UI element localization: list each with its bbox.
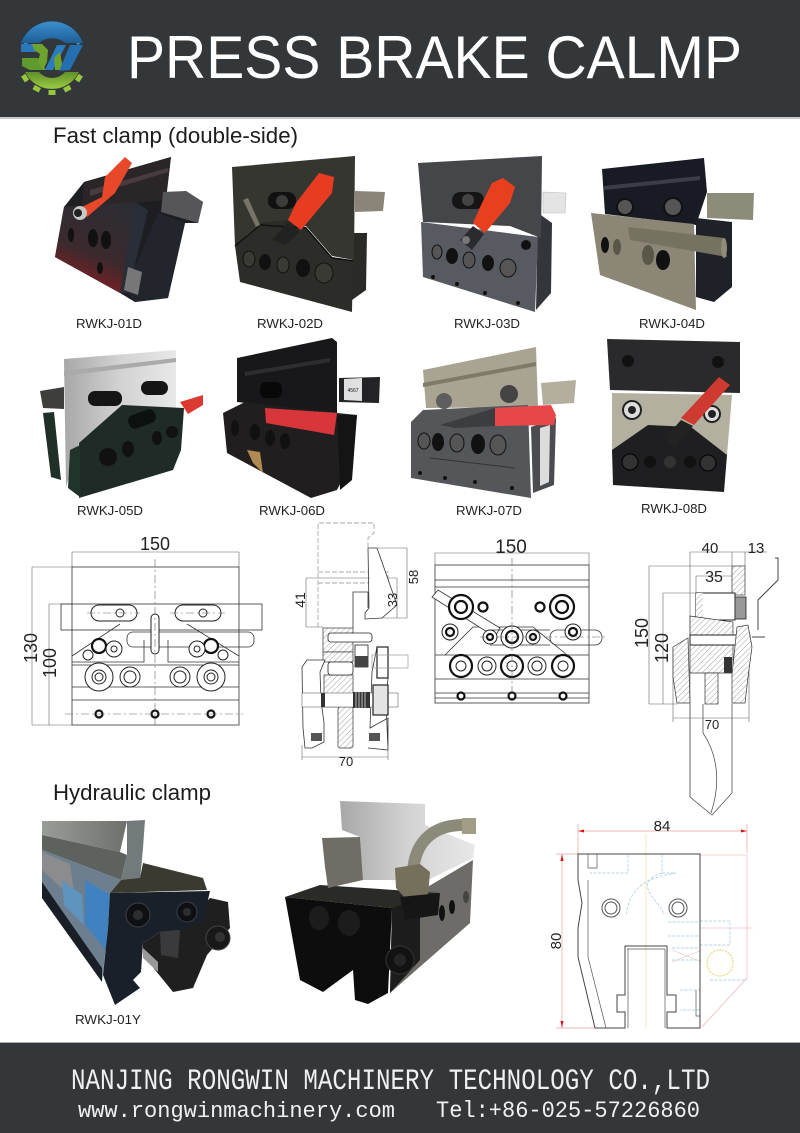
label RWKJ-06D: RWKJ-06D [259,504,325,518]
drawing: front view with horizontal lever [432,537,608,703]
dimension 130 [21,567,72,725]
product RWKJ-07D [411,347,576,498]
product RWKJ-02D [232,156,385,312]
product hydraulic clamp with fitting [285,801,476,1004]
dimension 150: 150 [140,534,170,554]
drawing: side section with tool [292,523,421,769]
product RWKJ-04D [591,158,754,310]
icon: company gear logo [21,21,83,95]
dimension 40: 40 [702,540,718,557]
product RWKJ-08D [607,339,740,492]
dimension 150: 150 [632,618,652,648]
product RWKJ-05D [40,350,203,498]
dimension 70: 70 [705,717,719,732]
dimension 35 [696,569,732,593]
product RWKJ-06D: 4567 [347,388,359,394]
dimension 33 [382,578,400,618]
heading: hydraulic clamp: Hydraulic clamp [53,780,211,805]
heading: fast clamp: Fast clamp (double-side) [53,123,298,148]
dimension 41: 41 [292,592,308,608]
product RWKJ-01D [55,157,203,302]
dimension 80 [548,854,595,1028]
telephone: Tel:+86-025-57226860 [436,1098,700,1124]
dimension 150 [72,534,239,567]
dimension 70 [302,745,388,769]
dimension 35: 35 [705,569,723,586]
dimension 150: 150 [495,537,527,558]
drawing: hydraulic clamp outline [548,818,753,1028]
product RWKJ-06D [223,338,380,498]
dimension 33: 33 [385,593,400,607]
dimension 40 [690,540,732,797]
dimension 100 [40,604,72,725]
header band [0,0,800,119]
product RWKJ-01Y [42,820,230,1005]
dimension 150 [632,566,732,704]
dimension 84 [578,818,747,854]
dimension 70 [673,647,749,732]
label RWKJ-05D: RWKJ-05D [77,504,143,518]
dimension 58 [377,548,421,618]
dimension 84: 84 [654,818,670,835]
label RWKJ-01D: RWKJ-01D [76,317,142,331]
dimension 13: 13 [748,540,764,557]
title: PRESS BRAKE CALMP [127,24,742,91]
dimension 120: 120 [652,633,672,663]
drawing: section with punch blade [632,540,778,815]
label RWKJ-04D: RWKJ-04D [639,317,705,331]
website: www.rongwinmachinery.com [78,1099,395,1124]
label RWKJ-03D: RWKJ-03D [454,317,520,331]
label RWKJ-08D: RWKJ-08D [641,502,707,516]
dimension 80: 80 [548,933,565,949]
dimension 70: 70 [339,754,353,769]
label RWKJ-01Y: RWKJ-01Y [75,1012,141,1027]
dimension 100: 100 [40,648,60,678]
label RWKJ-02D: RWKJ-02D [257,317,323,331]
footer band [0,1042,800,1133]
label RWKJ-07D: RWKJ-07D [456,504,522,518]
dimension 130: 130 [21,633,41,663]
drawing: front view with lever [21,534,262,725]
dimension 150 [435,537,589,565]
dimension 58: 58 [406,570,421,584]
dimension 41 [292,578,370,627]
dimension 13 [732,540,767,566]
dimension 120 [652,593,696,704]
product RWKJ-03D [418,156,566,312]
